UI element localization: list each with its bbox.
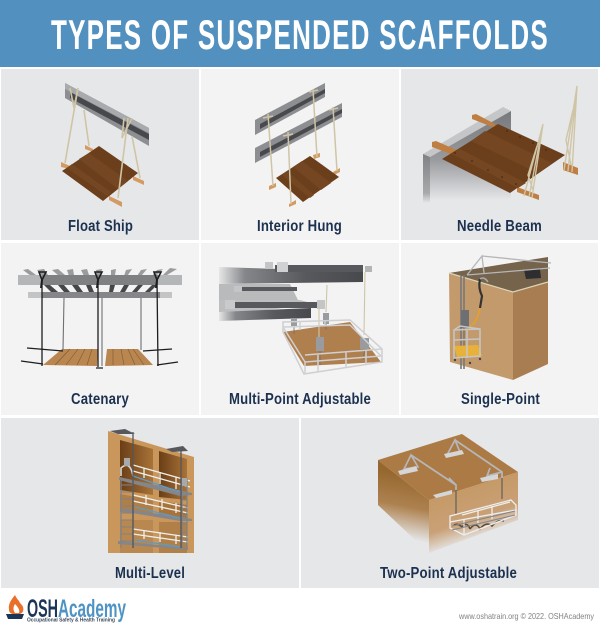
icon: interior hung scaffold (255, 83, 342, 207)
label: Needle Beam: Needle Beam (457, 218, 542, 235)
panel: Float Ship (1, 69, 199, 240)
panel: Needle Beam (401, 69, 598, 240)
logo: OSHAcademy: Academy (58, 595, 126, 623)
logo: OSHAcademy (6, 595, 126, 624)
icon: needle beam scaffold (423, 86, 578, 203)
logo wordmark: OSH (27, 595, 58, 623)
panel: Two-Point Adjustable (301, 418, 599, 588)
panel: Multi-Level (1, 418, 299, 588)
icon: two-point adjustable scaffold (378, 434, 518, 553)
panel: Catenary (1, 243, 199, 415)
icon: flame (6, 595, 24, 619)
label: Two-Point Adjustable: Two-Point Adjustable (380, 565, 517, 582)
label: Interior Hung: Interior Hung (257, 218, 342, 235)
icon: single-point scaffold (449, 256, 551, 380)
label: Multi-Point Adjustable: Multi-Point Adjustable (229, 391, 371, 408)
panel: Multi-Point Adjustable (201, 243, 399, 415)
label: Single-Point: Single-Point (461, 391, 540, 408)
label: Multi-Level: Multi-Level (115, 565, 185, 582)
panel: Single-Point (401, 243, 598, 415)
logo tagline: Occupational Safety & Health Training (27, 618, 115, 624)
icon: multi-point adjustable scaffold (219, 262, 382, 374)
icon: multi-level scaffold (108, 429, 194, 553)
icon: catenary scaffold (18, 268, 182, 368)
icon: float ship scaffold (61, 83, 149, 207)
label: Float Ship: Float Ship (68, 218, 133, 235)
label: Catenary: Catenary (71, 391, 129, 408)
header banner (0, 0, 600, 67)
panel: Interior Hung (201, 69, 399, 240)
